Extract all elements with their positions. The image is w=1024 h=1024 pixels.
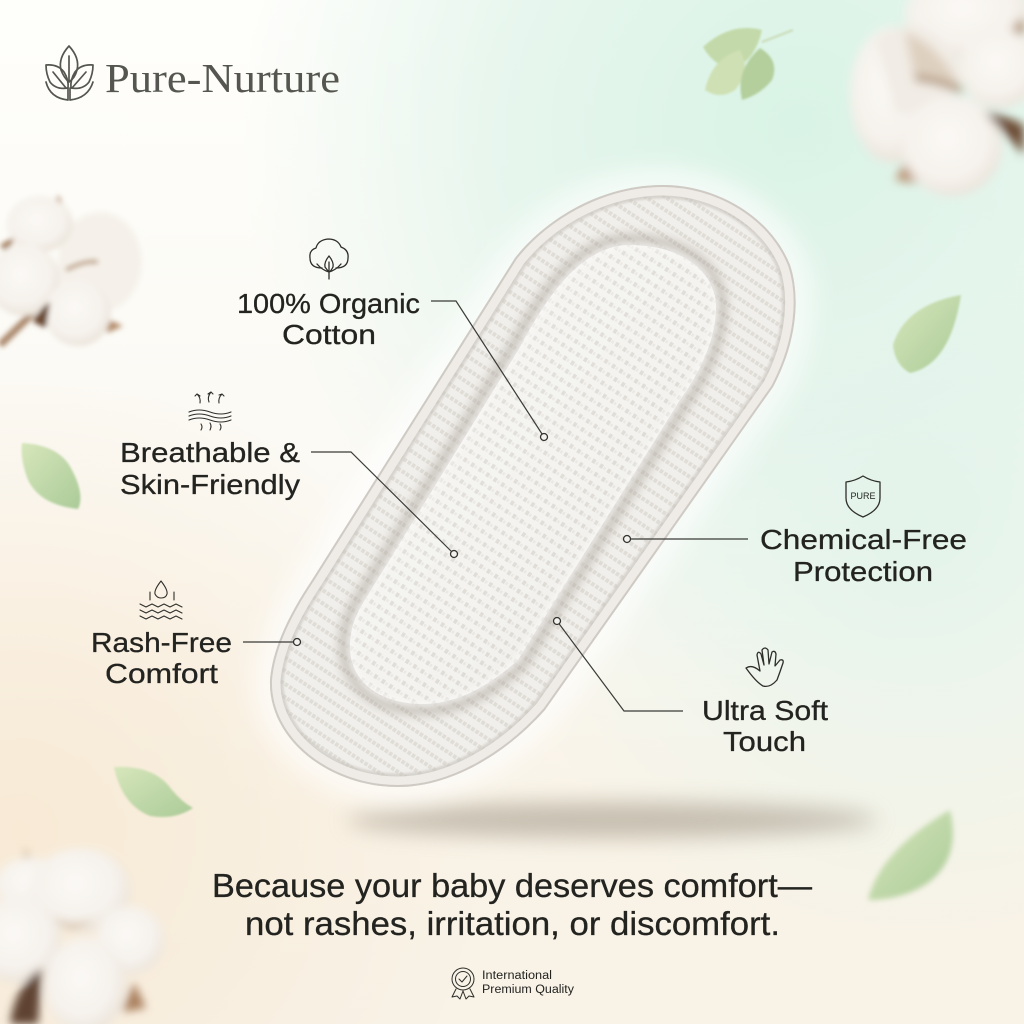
callout: chemical-free: Protection — [793, 556, 933, 587]
callout: chemical-free — [624, 476, 967, 587]
icon: PURE shield — [846, 476, 880, 517]
leader line — [431, 301, 548, 440]
callout: ultra soft: Touch — [723, 726, 806, 757]
label: Chemical-Free — [760, 524, 967, 555]
logo icon: sprouting leaves — [46, 46, 93, 100]
tagline: not rashes, irritation, or discomfort. — [245, 905, 780, 942]
callout: breathable — [120, 392, 458, 558]
quality badge — [452, 968, 574, 999]
leader line — [554, 618, 683, 711]
cotton boll: left — [0, 195, 142, 346]
leader line — [624, 536, 748, 542]
cotton boll: bottom left — [0, 848, 164, 1024]
label: 100% Organic — [237, 288, 420, 319]
leaf: right — [893, 295, 961, 373]
pad channel shadow — [350, 245, 716, 704]
label: Ultra Soft — [702, 695, 828, 726]
tagline — [212, 867, 812, 942]
callout: organic cotton: Cotton — [282, 319, 376, 350]
label: Breathable & — [120, 437, 300, 468]
leader line — [243, 638, 300, 646]
leaf: top — [703, 28, 793, 100]
icon: airflow — [189, 392, 231, 430]
badge text: International — [482, 970, 552, 982]
leaf: left — [22, 443, 80, 509]
quality badge: Premium Quality — [482, 984, 574, 996]
callout: rash-free: Comfort — [105, 658, 218, 689]
tagline: Because your baby deserves comfort— — [212, 867, 812, 904]
icon: hand — [746, 648, 783, 686]
cotton boll: top right — [850, 0, 1024, 196]
icon: drop and waves — [140, 581, 182, 619]
icon: cotton boll — [310, 239, 348, 279]
pad outer rim — [270, 185, 796, 787]
logo wordmark: Pure-Nurture — [105, 55, 340, 101]
callout: rash-free — [91, 581, 300, 689]
callout: ultra soft — [554, 618, 828, 757]
callout: organic cotton — [237, 239, 548, 440]
callout: breathable: Skin-Friendly — [120, 469, 300, 500]
product shadow — [347, 802, 877, 838]
icon: rosette — [452, 968, 474, 999]
label: Rash-Free — [91, 627, 232, 658]
pad raised centre — [350, 245, 716, 704]
leaf: lower left — [114, 767, 193, 817]
logo — [46, 46, 340, 101]
leader line — [311, 452, 458, 558]
leaf: lower right — [868, 810, 953, 900]
product: baby diaper pad — [270, 185, 796, 787]
icon: PURE shield: PURE — [850, 491, 876, 501]
